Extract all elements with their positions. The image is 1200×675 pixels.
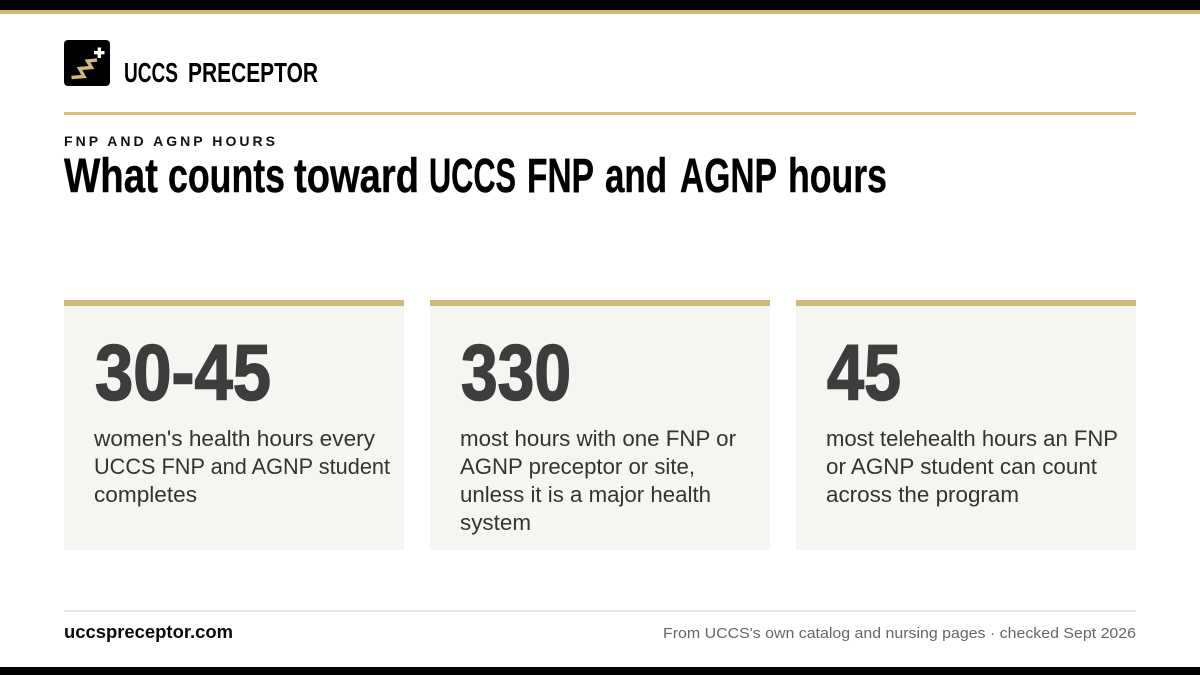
description: telehealth limit: or AGNP student can count xyxy=(826,454,1097,479)
description: telehealth limit xyxy=(826,426,1118,507)
description: women's health hours: UCCS FNP and AGNP student xyxy=(94,454,390,479)
footer source note: From UCCS's own catalog and nursing pages · checked Sept 2026 xyxy=(663,625,1136,642)
footer site link: uccspreceptor.com xyxy=(64,622,233,642)
eyebrow: FNP AND AGNP HOURS xyxy=(64,133,275,149)
stat: 30-45: 30-45 xyxy=(95,328,271,416)
title xyxy=(64,150,887,203)
title: toward xyxy=(294,150,419,203)
title: hours xyxy=(788,150,887,203)
icon: logo stairs with plus xyxy=(64,40,110,86)
title: UCCS xyxy=(429,150,516,203)
description: preceptor or site limit: most hours with one FNP or xyxy=(460,426,736,451)
description: preceptor or site limit: unless it is a major health xyxy=(460,482,711,507)
description: telehealth limit: most telehealth hours an FNP xyxy=(826,426,1118,451)
description: preceptor or site limit xyxy=(460,426,736,535)
description: preceptor or site limit: system xyxy=(460,510,531,535)
title: What xyxy=(64,150,158,203)
description: telehealth limit: across the program xyxy=(826,482,1019,507)
description: preceptor or site limit: AGNP preceptor or site, xyxy=(460,454,695,479)
panel: telehealth limit xyxy=(796,300,1136,550)
title: AGNP xyxy=(680,150,777,203)
title: and xyxy=(605,150,667,203)
description: women's health hours: completes xyxy=(94,482,197,507)
stat: 330: 330 xyxy=(461,328,571,416)
top bar xyxy=(0,0,1200,14)
brand name xyxy=(124,57,318,88)
brand name: PRECEPTOR xyxy=(188,57,318,88)
title: FNP xyxy=(527,150,594,203)
description: women's health hours xyxy=(93,426,390,507)
stat: 45: 45 xyxy=(827,328,901,416)
description: women's health hours: women's health hours every xyxy=(93,426,375,451)
panel: preceptor or site limit xyxy=(430,300,770,550)
title: counts xyxy=(168,150,285,203)
brand name: UCCS xyxy=(124,57,178,88)
panel: women's health hours xyxy=(64,300,404,550)
bottom bar xyxy=(0,667,1200,675)
